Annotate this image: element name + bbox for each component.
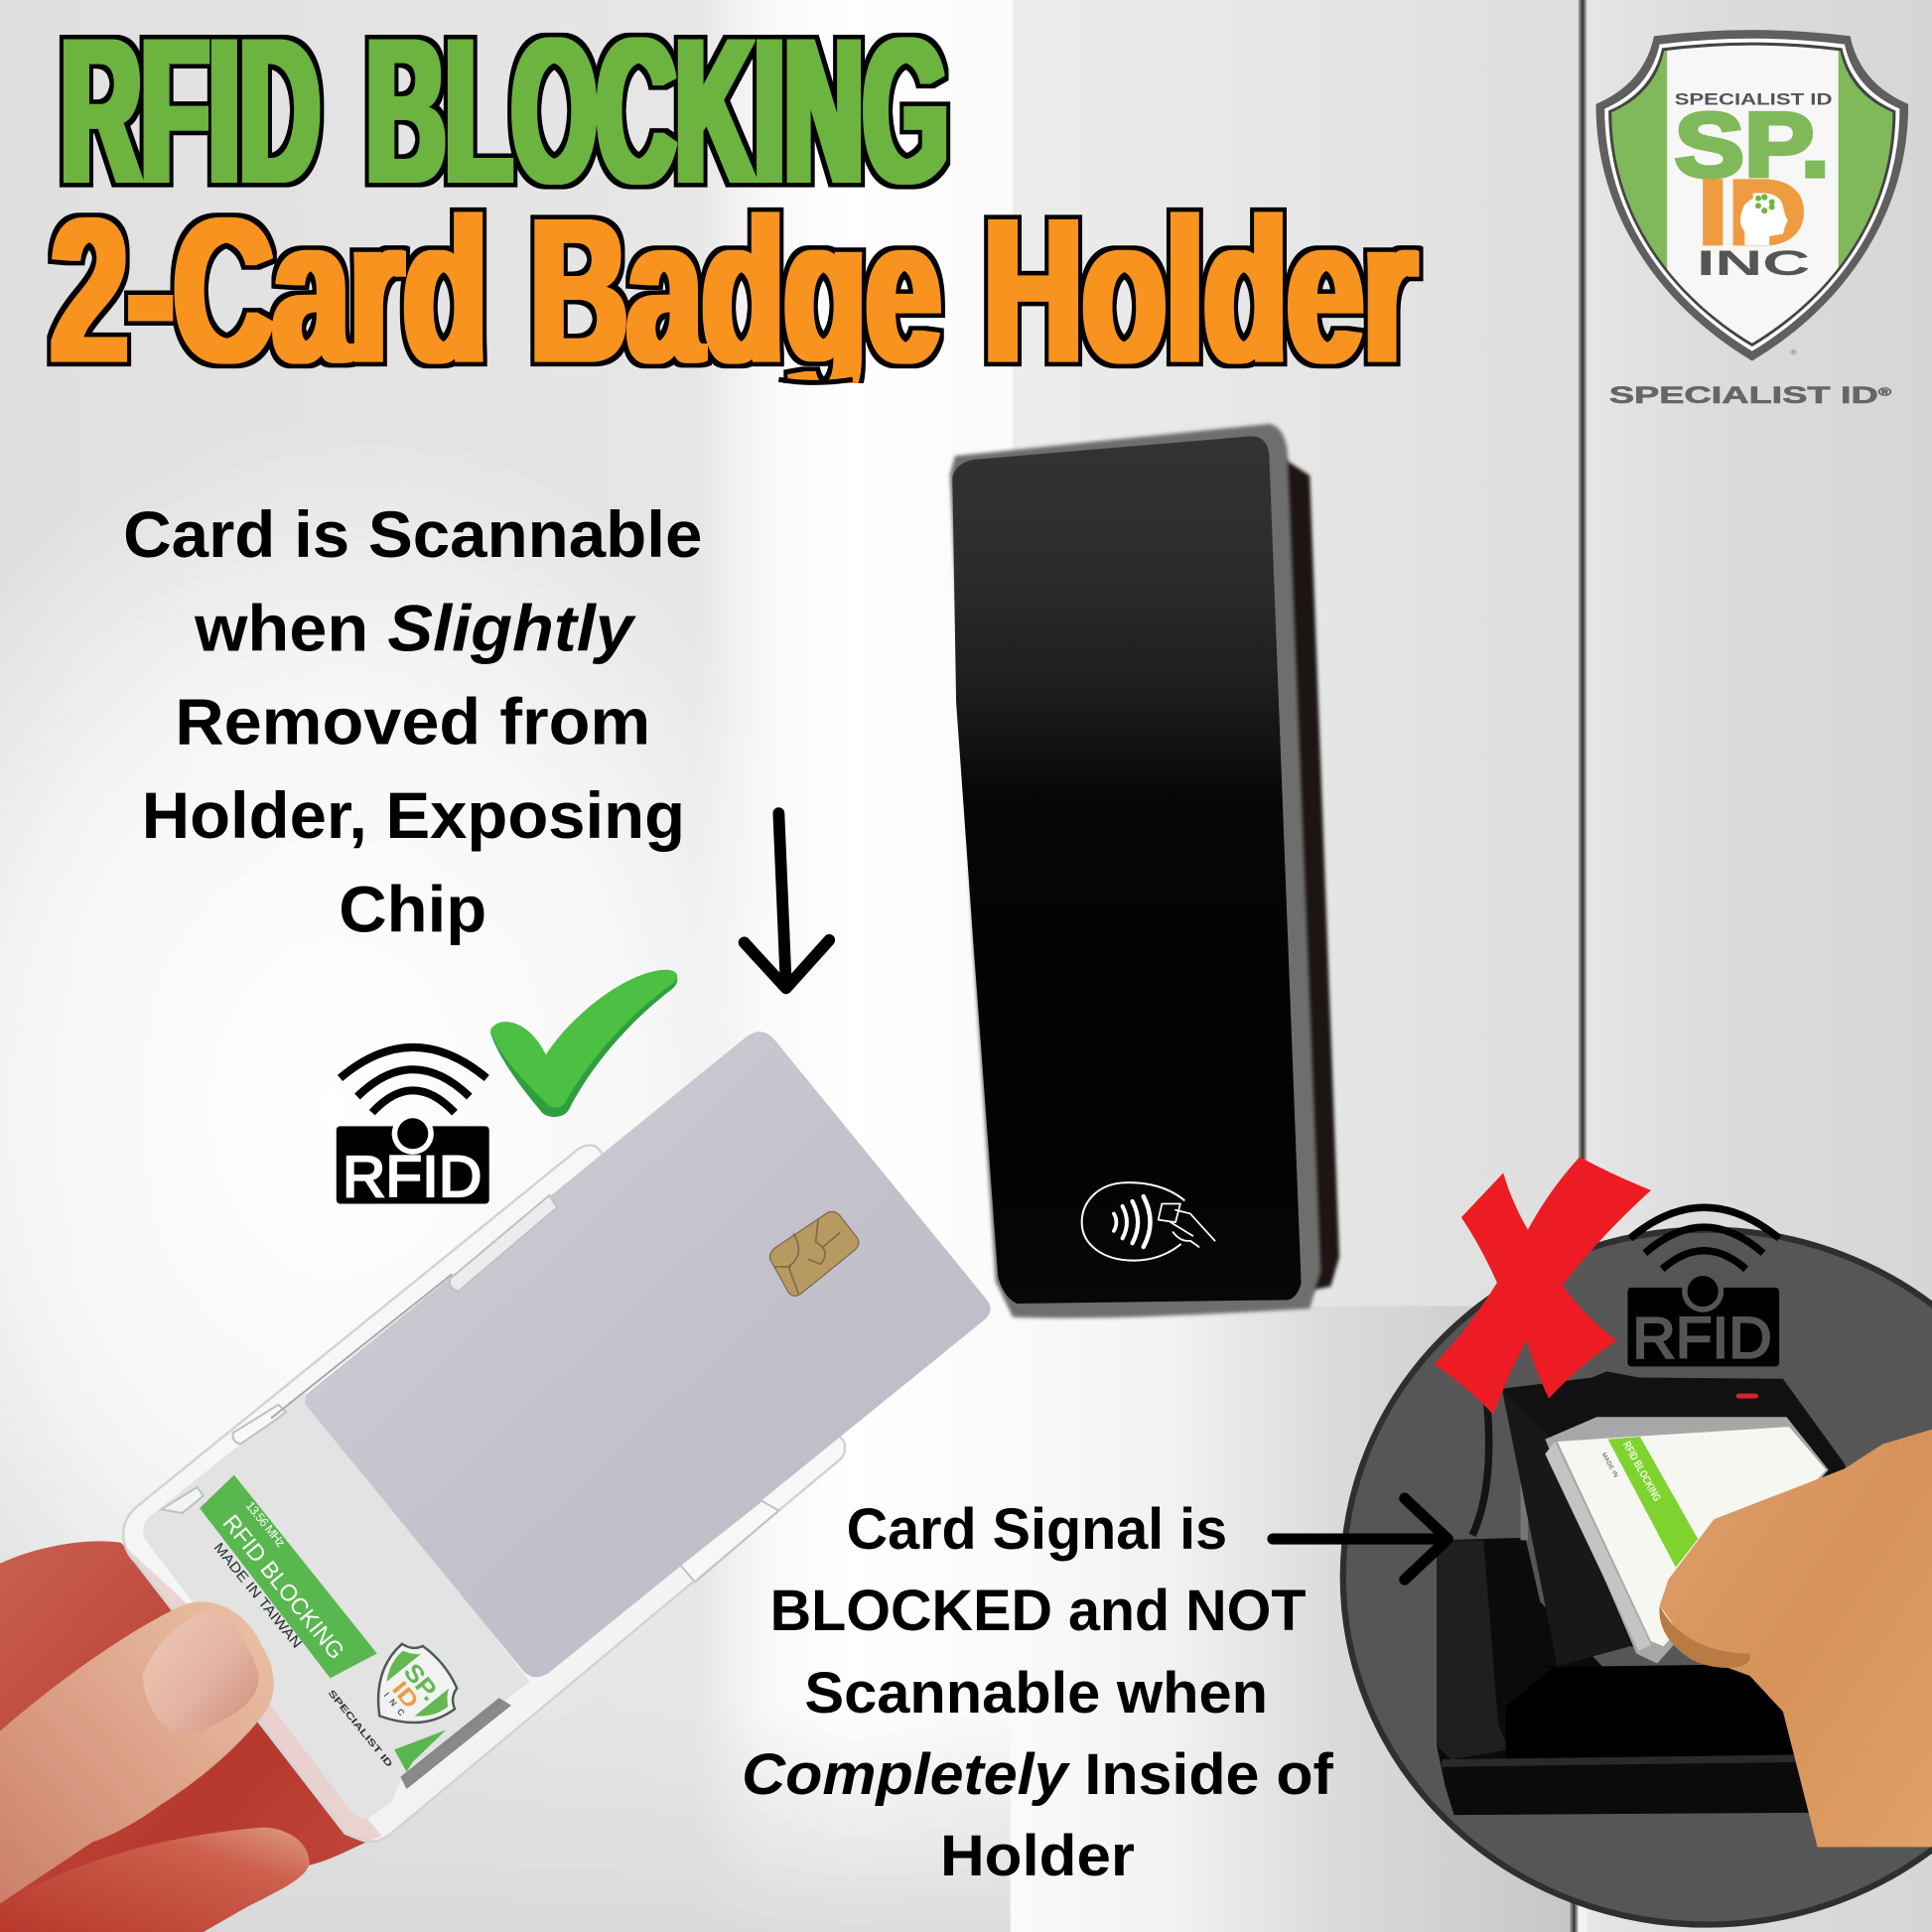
logo: Specialist ID shield: ID xyxy=(1698,163,1806,264)
logo: Specialist ID shield: INC xyxy=(1697,245,1810,283)
inserted printed card: SPECIALIST ID xyxy=(327,1688,395,1769)
mini shield logo on card: INC xyxy=(382,1691,407,1719)
clear holder tabs xyxy=(162,1195,778,1583)
logo: Specialist ID shield: SPECIALIST ID xyxy=(1609,382,1777,408)
heading line 2: Badge xyxy=(530,177,941,405)
logo: Specialist ID shield: ® xyxy=(1878,386,1892,398)
icon: green check mark xyxy=(490,970,677,1117)
heading line 1: RFID xyxy=(61,0,320,225)
panel: blocked scan circle xyxy=(1343,1230,1932,1925)
icon: red X xyxy=(1435,1157,1651,1415)
inserted printed card: MADE IN TAIWAN xyxy=(210,1540,305,1652)
text block: scannable explanation: Card is Scannable xyxy=(123,497,702,571)
text block: scannable explanation: when Slightly xyxy=(194,591,636,664)
icon: contactless tap symbol xyxy=(1082,1182,1215,1261)
heading line 2 xyxy=(47,207,1424,383)
arrow: down to card xyxy=(745,813,829,988)
heading line 1 xyxy=(61,0,948,225)
inserted printed card: RFID BLOCKING xyxy=(218,1510,349,1664)
white slid-out smart card xyxy=(305,1032,991,1677)
hand: fingers behind holder xyxy=(0,1541,382,1932)
mini shield logo on card xyxy=(353,1632,469,1748)
heading line 1: BLOCKING xyxy=(366,0,948,225)
scanned badge holder: MADE IN xyxy=(1600,1451,1619,1478)
RFID reader device xyxy=(950,424,1339,1318)
arrow: pointing to reader xyxy=(1273,1498,1448,1580)
text block: scannable explanation: Holder, Exposing xyxy=(142,778,685,852)
hand: scanning hand xyxy=(1659,1430,1932,1847)
heading line 2: 2-Card xyxy=(52,177,487,405)
hand: thumb and lower finger xyxy=(0,1602,310,1932)
icon: RFID scannable: RFID xyxy=(343,1145,482,1209)
icon: RFID blocked: RFID xyxy=(1632,1307,1772,1371)
logo: Specialist ID shield xyxy=(1589,25,1922,408)
scanned badge holder xyxy=(1545,1417,1829,1663)
icon: head with dots xyxy=(1740,194,1788,245)
text block: scannable explanation xyxy=(123,497,702,945)
reader top plate xyxy=(1502,1371,1872,1666)
text block: blocked explanation: Card Signal is xyxy=(847,1497,1227,1562)
scanned badge holder: RFID BLOCKING xyxy=(1620,1440,1663,1504)
icon: gold chip xyxy=(769,1212,859,1296)
text block: blocked explanation: Holder xyxy=(940,1824,1135,1888)
badge holder: clear case xyxy=(123,1032,991,1842)
logo: Specialist ID shield: SP. xyxy=(1675,94,1830,196)
text block: scannable explanation: Chip xyxy=(339,872,486,945)
text block: blocked explanation: Completely Inside of xyxy=(742,1742,1333,1807)
heading line 2: Holder xyxy=(984,177,1417,405)
inserted printed card xyxy=(143,1392,530,1819)
text block: scannable explanation: Removed from xyxy=(175,685,650,759)
text block: blocked explanation xyxy=(742,1497,1333,1888)
text block: blocked explanation: BLOCKED and NOT xyxy=(770,1579,1307,1643)
title xyxy=(52,0,1417,405)
text block: blocked explanation: Scannable when xyxy=(804,1661,1268,1725)
logo: Specialist ID shield: ® xyxy=(1790,346,1797,356)
logo: Specialist ID shield: SPECIALIST ID xyxy=(1675,89,1832,108)
icon: RFID scannable xyxy=(337,1047,489,1209)
inserted printed card: 13.56 MHz xyxy=(243,1499,288,1550)
mini shield logo on card: ID xyxy=(387,1677,424,1714)
icon: RFID blocked xyxy=(1627,1207,1779,1371)
reader base xyxy=(1437,1404,1809,1815)
mini shield logo on card: SP. xyxy=(398,1659,444,1707)
